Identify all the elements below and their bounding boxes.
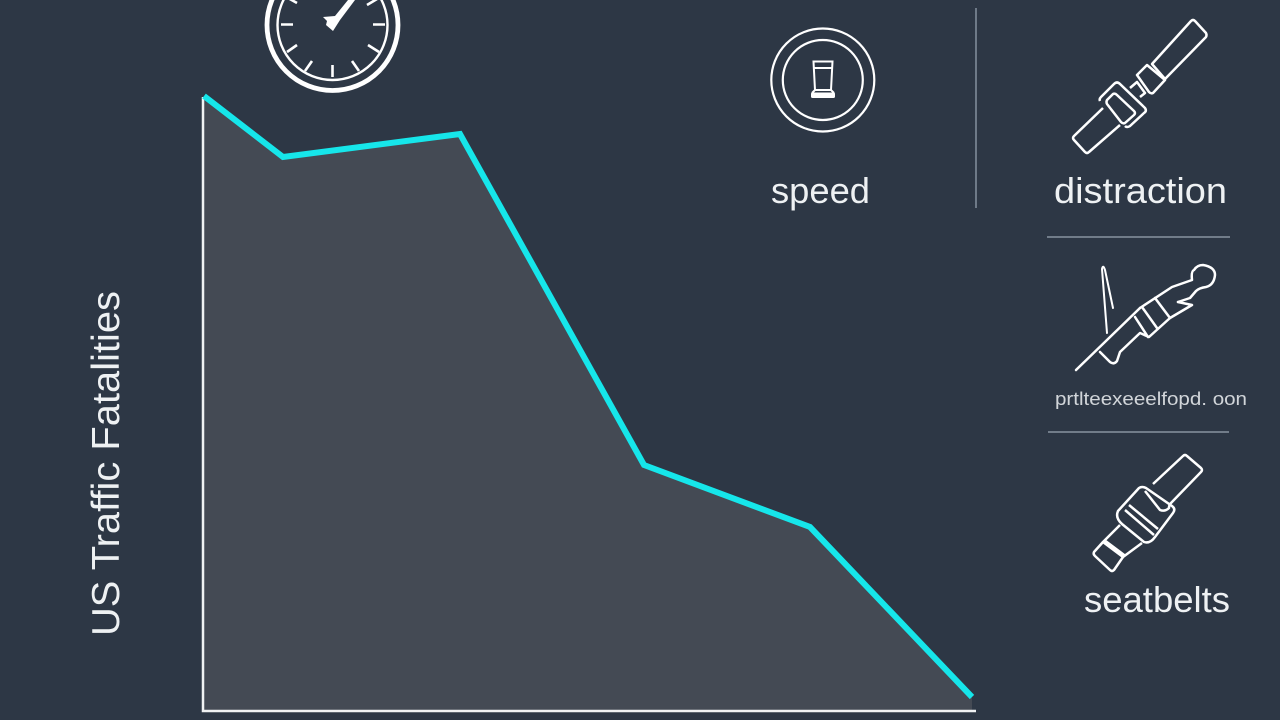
label: distraction: distraction	[1054, 170, 1227, 211]
factor: seatbelts	[1084, 455, 1230, 620]
icon: speedometer gauge	[267, 0, 398, 90]
label: speed: speed	[771, 170, 870, 211]
chart axes	[203, 97, 976, 711]
icon: seatbelt buckle	[1094, 455, 1202, 571]
divider	[1047, 236, 1230, 238]
factor: speed	[771, 28, 874, 211]
vertical divider	[975, 8, 977, 208]
label: seatbelts: seatbelts	[1084, 579, 1230, 620]
factor: middle garbled item	[1055, 265, 1247, 409]
label: garbled caption: prtlteexeeelfopd. oon	[1055, 389, 1247, 409]
divider	[1048, 431, 1229, 433]
icon: belt buckle	[1073, 20, 1206, 153]
y-axis title: US Traffic Fatalities	[85, 291, 128, 636]
icon: hand with belt	[1076, 265, 1215, 370]
cyan trend line	[204, 96, 972, 697]
area chart	[203, 96, 976, 711]
factor: distraction	[1054, 20, 1227, 211]
icon: glass in double circle	[771, 28, 874, 132]
chart area fill	[204, 96, 972, 710]
